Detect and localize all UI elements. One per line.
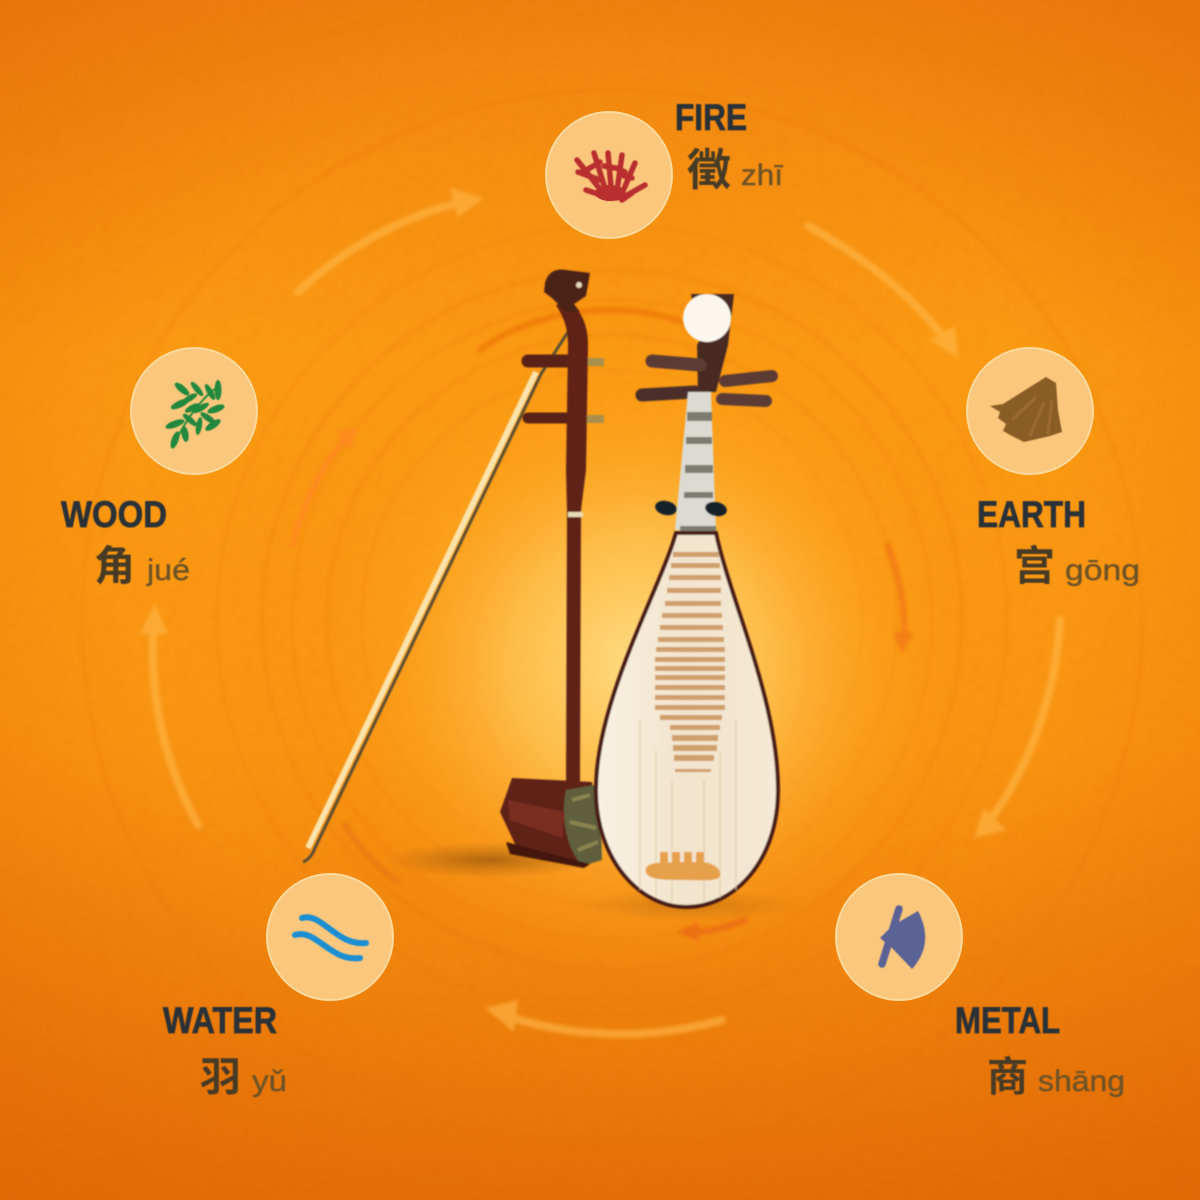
label: wood: jué: [146, 554, 190, 587]
arrow: fire to earth: [808, 226, 958, 358]
arrow: inner metal to water: [677, 920, 745, 941]
pipa strings: [640, 720, 736, 903]
erhu lower pegs: [528, 361, 604, 419]
label: fire: 徵: [687, 146, 731, 195]
pipa knobs: [654, 499, 728, 518]
label: earth: [977, 494, 1140, 589]
pipa bridge: [646, 852, 720, 880]
pipa neck: [675, 392, 716, 531]
label: metal: METAL: [955, 1000, 1060, 1041]
pipa body: [596, 533, 778, 907]
label: wood: 角: [94, 543, 135, 589]
icon: earth medallion: [967, 348, 1093, 474]
label: earth: gōng: [1065, 554, 1140, 587]
label: metal: 商: [987, 1054, 1028, 1100]
label: water: [163, 1000, 287, 1100]
label: water: yǔ: [252, 1065, 287, 1098]
erhu head: [544, 270, 590, 312]
erhu ring: [568, 512, 583, 517]
instrument shadow: [385, 842, 800, 921]
arrow: inner earth to metal: [888, 545, 914, 654]
arrow: metal to water: [485, 1000, 722, 1034]
label: metal: shāng: [1038, 1065, 1125, 1098]
label: water: WATER: [163, 1000, 277, 1041]
pipa head: [683, 294, 734, 392]
instrument: erhu: [303, 270, 604, 868]
arrow: water to wood: [140, 604, 198, 825]
label: water: 羽: [200, 1054, 241, 1100]
label: wood: [61, 494, 190, 589]
instrument: pipa: [596, 294, 778, 907]
pipa frets: [655, 552, 725, 772]
label: earth: EARTH: [977, 494, 1086, 535]
erhu bow: [303, 332, 568, 862]
cycle arrows: outer ring: [140, 188, 1060, 1034]
icon: fire medallion: [546, 112, 672, 238]
label: wood: WOOD: [61, 494, 167, 535]
arrow: wood to fire: [298, 188, 484, 292]
arrow: earth to metal: [974, 620, 1060, 838]
pipa tuning pegs: [642, 361, 772, 401]
label: metal: [955, 1000, 1125, 1100]
label: fire: [675, 97, 784, 195]
arc: inner top: [480, 310, 690, 350]
icon: metal medallion: [836, 874, 962, 1000]
arrow: inner wood to fire: [292, 428, 358, 545]
icon: wood medallion: [131, 348, 257, 474]
label: fire: FIRE: [675, 97, 747, 138]
icon: water medallion: [267, 874, 393, 1000]
erhu resonator: [500, 778, 602, 868]
label: fire: zhī: [741, 159, 784, 192]
label: earth: 宫: [1014, 543, 1055, 589]
arc: inner water: [345, 825, 398, 882]
cycle arrows: inner ring: [292, 310, 914, 941]
erhu neck: [556, 300, 588, 785]
